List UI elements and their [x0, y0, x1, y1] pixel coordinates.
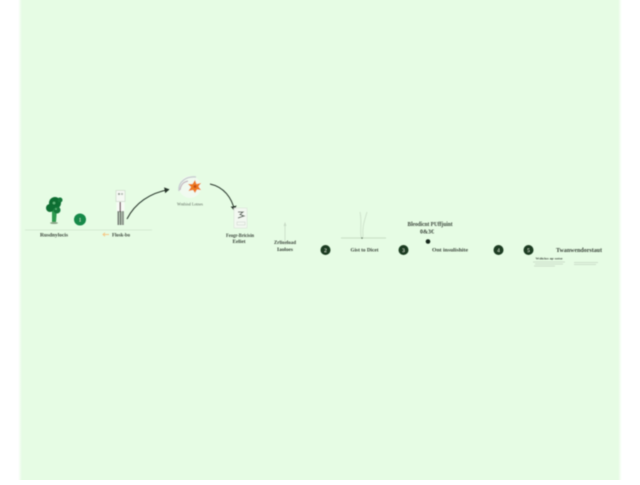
step badge 4 — [494, 245, 504, 255]
label: document: Eeliet — [232, 240, 246, 245]
icon: document — [234, 208, 247, 228]
step badge 5 — [524, 245, 534, 255]
label: document — [226, 234, 254, 245]
callout heading — [408, 222, 452, 236]
label: broccoli: Rusdnylocis — [40, 234, 68, 238]
step badge 3: 3 — [402, 249, 405, 254]
label: forked plant: Gist to Dicet — [350, 248, 379, 254]
step badge 1: 1 — [79, 218, 82, 224]
step badge 2 — [320, 245, 330, 255]
marker dot — [426, 239, 430, 244]
small note right — [574, 262, 598, 264]
step badge 3 — [398, 245, 408, 255]
label: tool: Flosk-bo — [112, 234, 130, 238]
step badge 2: 2 — [324, 249, 327, 254]
baseline left — [25, 229, 152, 231]
icon: tool — [116, 190, 125, 225]
icon: thin stem — [284, 223, 286, 245]
label: document: Feogr-Bricisin — [226, 234, 254, 239]
label: flower: Wnthisd Lotnes — [177, 202, 203, 206]
step badge 1 — [74, 214, 86, 226]
icon: orange arrow — [103, 233, 109, 236]
label: stem: Iaoloes — [277, 248, 293, 253]
icon: broccoli — [46, 197, 62, 224]
label: insulishite: Ont insulishite — [432, 248, 469, 254]
arrow: tool to flower — [127, 190, 169, 219]
arrow: flower to document — [210, 184, 234, 210]
icon: flower — [179, 176, 201, 198]
label: stem — [274, 241, 296, 253]
small note left — [533, 262, 565, 266]
step badge 4: 4 — [497, 249, 500, 254]
flow diagram — [25, 176, 602, 266]
heading: final step: Twanwendorstaut — [556, 248, 602, 254]
label: stem: Zrlioeload — [274, 241, 296, 246]
callout heading: Bleodicnt PUffjuint — [408, 222, 452, 228]
step badge 5: 5 — [527, 249, 530, 254]
icon: forked plant — [341, 212, 386, 239]
callout heading: 0&3€ — [420, 230, 434, 236]
small note heading: Wdiclos ap sotse — [536, 256, 563, 260]
